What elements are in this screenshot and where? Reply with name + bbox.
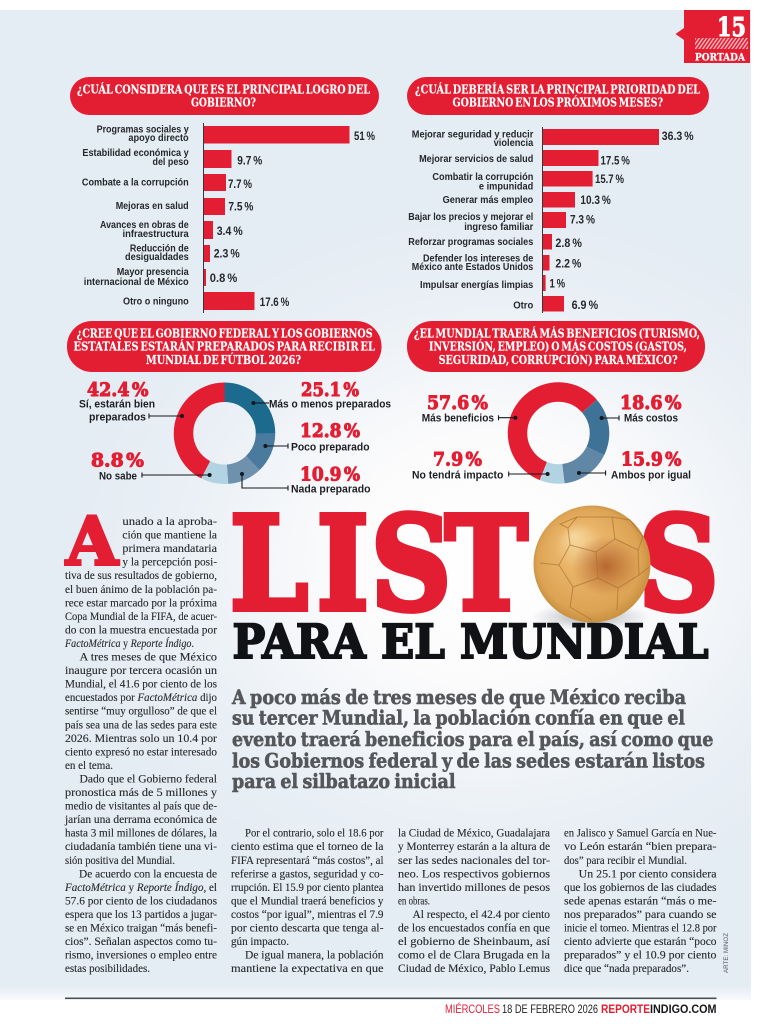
bar chart: logro: 3.4 % [217, 224, 243, 238]
page tab: 15 portada [676, 10, 750, 64]
bar chart: logro: 7.5 % [228, 200, 254, 214]
callout: 18.6 % mas costos: 18.6 % [620, 392, 682, 414]
text column 1: inaugure por tercera ocasión un [65, 664, 217, 677]
heading pill: beneficios: SEGURIDAD, CORRUPCIÓN) PARA MÉXICO? [439, 351, 678, 367]
text column 4: preparados” y el 10.9 por ciento [564, 949, 717, 962]
text column 3: en obras. [398, 894, 430, 907]
subheading: su tercer Mundial, la población confía en que el [232, 706, 685, 730]
text column 1: se en México traigan “más benefi- [65, 922, 217, 934]
text column 2: ciento estima que el torneo de la [231, 840, 384, 853]
callout: 8.8 % no sabe: 8.8 % [91, 450, 144, 472]
heading pill: prioridad [407, 77, 709, 115]
text column 1: ciudadanía también tiene una vi- [65, 840, 217, 853]
callout: 25.1 % mas o menos preparados: Más o menos preparados [269, 399, 391, 411]
callout: 10.9 % nada preparado [240, 464, 371, 496]
text column 3 [398, 827, 551, 975]
text column 4: vo León estarán “bien prepara- [564, 840, 717, 853]
text column 2: costos “por igual”, mientras el 7.9 [231, 908, 384, 921]
callout: 8.8 % no sabe [91, 450, 212, 482]
text column 1: primera mandataria [122, 542, 217, 555]
text column 2: mantiene la expectativa en que [231, 962, 384, 975]
callout: 7.9 % no tendra impacto: No tendrá impacto [412, 470, 504, 482]
text column 3: como el de Clara Brugada en la [398, 949, 550, 962]
footer date and site: MIÉRCOLES [445, 1003, 500, 1016]
bar chart: prioridad: Defender los intereses de [423, 254, 534, 264]
callout: 8.8 % no sabe: No sabe [99, 470, 137, 482]
bar chart: logro: apoyo directo [128, 133, 189, 144]
bar chart: logro [82, 123, 375, 313]
text column 2: que el Mundial traerá beneficios y [231, 894, 384, 907]
text column 1: rismo, inversiones o empleo entre [65, 949, 217, 962]
heading pill: logro: ¿CUÁL CONSIDERA QUE ES EL PRINCIPAL LOGRO DEL [77, 82, 370, 96]
text column 4: Un 25.1 por ciento considera [579, 867, 716, 880]
callout: 12.8 % poco preparado [263, 420, 370, 453]
text column 1: do con la muestra encuestada por [65, 623, 217, 636]
bar chart: prioridad: Combatir la corrupción [432, 172, 533, 183]
text column 1: rece estar marcado por la próxima [65, 596, 217, 609]
bar chart: prioridad: 10.3 % [580, 193, 611, 207]
subheading: los Gobiernos federal y de las sedes estarán listos [232, 748, 705, 772]
heading pill: beneficios [407, 321, 705, 372]
bar chart: prioridad: Impulsar energías limpias [420, 280, 534, 291]
bar chart: prioridad: Bajar los precios y mejorar el [408, 212, 534, 223]
callout: 57.6 % mas beneficios: Más beneficios [422, 413, 494, 425]
callout: 10.9 % nada preparado: 10.9 % [300, 464, 360, 486]
callout: 7.9 % no tendra impacto: 7.9 % [433, 449, 482, 471]
heading pill: preparados: ¿CREE QUE EL GOBIERNO FEDERAL Y LOS GOBIERNOS [77, 326, 373, 340]
text column 3: Al respecto, el 42.4 por ciento [412, 908, 550, 921]
text column 2: De igual manera, la población [245, 949, 384, 962]
text column 2: rrupción. El 15.9 por ciento plantea [231, 881, 384, 894]
panel: beneficios o costos [407, 321, 705, 491]
footer date and site [445, 1003, 716, 1016]
panel: principal logro del gobierno [70, 77, 379, 313]
bar chart: prioridad: 36.3 % [662, 129, 694, 143]
page tab: 15 portada: PORTADA [695, 52, 745, 64]
callout: 18.6 % mas costos [600, 392, 682, 425]
text column 1: hasta 3 mil millones de dólares, la [65, 827, 217, 840]
bar chart: logro: Mayor presencia [117, 267, 189, 278]
callout: 42.4 % bien preparados [79, 379, 184, 423]
callout: 42.4 % bien preparados: 42.4 % [87, 379, 148, 401]
text column 4: ciento advierte que estarán “poco [564, 935, 717, 948]
callout: 57.6 % mas beneficios: 57.6 % [427, 392, 488, 414]
bar chart: prioridad: Mejorar servicios de salud [419, 154, 533, 165]
text column 1: tiva de sus resultados de gobierno, [65, 569, 217, 582]
callout: 42.4 % bien preparados: Sí, estarán bien [79, 399, 155, 411]
footer date and site: REPORTE [601, 1004, 650, 1016]
text column 1: ciento expresó no estar interesado [65, 745, 217, 758]
bar chart: prioridad: 17.5 % [600, 154, 630, 168]
text column 2: Por el contrario, solo el 18.6 por [245, 827, 384, 840]
bar chart: prioridad: Otro [513, 300, 533, 312]
bar chart: logro: 0.8 % [210, 271, 238, 285]
text column 4: inicie el torneo. Mientras el 12.8 por [564, 922, 717, 934]
bar chart: prioridad: Generar más empleo [443, 195, 533, 206]
bar chart: logro: Combate a la corrupción [82, 178, 189, 188]
text column 4: que los gobiernos de las ciudades [564, 881, 717, 894]
credit: arte: ARTE: MINOZ [723, 933, 730, 973]
text column 2: gún impacto. [231, 935, 289, 948]
bar chart: logro: Estabilidad económica y [82, 148, 189, 159]
text column 4: sede apenas estarán “más o me- [564, 894, 717, 907]
heading pill: logro: GOBIERNO? [191, 94, 256, 110]
text column 1: 57.6 por ciento de los ciudadanos [65, 894, 217, 907]
callout: 12.8 % poco preparado: Poco preparado [291, 441, 370, 453]
bar chart: prioridad: violencia [494, 138, 534, 149]
bar chart: prioridad: 15.7 % [595, 172, 624, 186]
text column 1: FactoMétrica y Reporte Índigo, el [64, 880, 217, 894]
bar chart: logro: Mejoras en salud [116, 201, 189, 212]
bar chart: prioridad: 6.9 % [572, 298, 598, 312]
callout: 25.1 % mas o menos preparados: 25.1 % [301, 379, 359, 401]
text column 1: 2026. Mientras solo un 10.4 por [65, 732, 217, 745]
drop cap: A [65, 502, 119, 580]
heading pill: preparados: ESTATALES ESTARÁN PREPARADOS PARA RECIBIR EL [74, 338, 375, 354]
bar chart: prioridad: ingreso familiar [464, 222, 533, 233]
text column 3: ser las sedes nacionales del tor- [398, 854, 550, 867]
text column 4: nos preparados” para cuando se [564, 908, 716, 921]
text column 3: de los encuestados confía en que [398, 922, 550, 934]
text column 2: FIFA representará “más costos”, al [231, 854, 384, 867]
text column 1: unado a la aproba- [122, 515, 217, 528]
text column 3: y Monterrey estarán a la altura de [398, 840, 550, 853]
text column 3: el gobierno de Sheinbaum, así [398, 935, 551, 948]
heading pill: preparados [67, 321, 382, 372]
text column 2 [231, 827, 384, 975]
text column 1: ción que mantiene la [122, 529, 217, 542]
text column 4: dos” para recibir el Mundial. [564, 854, 687, 867]
text column 1: espera que los 13 partidos a jugar- [65, 908, 217, 921]
footer date and site: INDIGO.COM [650, 1004, 716, 1016]
text column 1 [64, 515, 217, 975]
title: para el mundial: PARA EL MUNDIAL [232, 615, 708, 670]
text column 1: Copa Mundial de la FIFA, de acuer- [65, 610, 217, 623]
subheading: para el silbatazo inicial [232, 769, 456, 793]
bar chart: logro: Otro o ninguno [123, 296, 189, 308]
bar chart: logro: 9.7 % [237, 153, 263, 167]
callout: 18.6 % mas costos: Más costos [624, 413, 678, 425]
bar chart: prioridad: 7.3 % [570, 213, 595, 227]
donut chart: preparados [184, 392, 266, 474]
text column 3: Ciudad de México, Pablo Lemus [398, 962, 550, 975]
bar chart: prioridad: 1 % [550, 277, 565, 291]
text column 1: pronostica más de 5 millones y [65, 786, 217, 799]
ball shadow [530, 603, 650, 631]
bar chart: logro: del peso [152, 157, 189, 168]
text column 1: y la percepción posi- [122, 556, 217, 569]
text column 1: en el tema. [65, 759, 113, 772]
icon: golden soccer ball [534, 506, 650, 622]
bar chart: prioridad: Mejorar seguridad y reducir [412, 130, 533, 140]
panel: principal prioridad del gobierno [407, 77, 709, 313]
bar chart: logro: Reducción de [130, 244, 189, 254]
text column 3: neo. Los respectivos gobiernos [398, 867, 551, 880]
bar chart: logro: 2.3 % [214, 247, 240, 261]
page tab: 15 portada: 15 [717, 13, 746, 43]
text column 1: jarían una derrama económica de [64, 813, 217, 826]
text column 1: A tres meses de que México [80, 650, 217, 664]
callout: 7.9 % no tendra impacto [412, 449, 550, 482]
bar chart: prioridad: 2.8 % [555, 236, 582, 250]
text column 3: han invertido millones de pesos [398, 881, 550, 894]
text column 3: la Ciudad de México, Guadalajara [398, 827, 550, 840]
text column 1: De acuerdo con la encuesta de [79, 867, 217, 880]
footer date and site: 18 DE FEBRERO 2026 [502, 1004, 598, 1016]
text column 2: referirse a gastos, seguridad y co- [231, 867, 384, 880]
text column 1: Dado que el Gobierno federal [80, 772, 217, 786]
callout: 15.9 % ambos por igual [577, 449, 691, 482]
callout: 25.1 % mas o menos preparados [251, 379, 391, 411]
bar chart: logro: 17.6 % [260, 295, 289, 309]
panel: preparacion de gobiernos [67, 321, 391, 496]
callout: 15.9 % ambos por igual: 15.9 % [621, 449, 682, 471]
bar chart: logro: Programas sociales y [97, 124, 189, 136]
heading pill: preparados: MUNDIAL DE FÚTBOL 2026? [146, 351, 301, 367]
bar chart: prioridad [408, 127, 694, 313]
text column 1: estas posibilidades. [65, 962, 150, 975]
callout: 15.9 % ambos por igual: Ambos por igual [611, 470, 691, 482]
text column 1: Mundial, el 41.6 por ciento de los [65, 678, 217, 691]
heading pill: logro [70, 77, 379, 115]
heading pill: beneficios: INVERSIÓN, EMPLEO) O MÁS COSTOS (GASTOS, [429, 338, 687, 354]
heading pill: prioridad: GOBIERNO EN LOS PRÓXIMOS MESES? [452, 94, 663, 110]
text column 1: el buen ánimo de la población pa- [65, 583, 217, 596]
bar chart: logro: infraestructura [122, 229, 189, 240]
bar chart: prioridad: Reforzar programas sociales [408, 237, 534, 248]
bar chart: prioridad: e impunidad [479, 182, 533, 192]
callout: 57.6 % mas beneficios [422, 392, 517, 425]
text column 1: sentirse “muy orgulloso” de que el [65, 705, 217, 718]
callout: 10.9 % nada preparado: Nada preparado [291, 484, 371, 496]
text column 4: dice que “nada preparados”. [564, 962, 689, 975]
text column 1: FactoMétrica y Reporte Índigo. [64, 636, 194, 650]
bar chart: logro: desigualdades [125, 252, 189, 263]
text column 1: país sea una de las sedes para este [65, 718, 217, 731]
bar chart: prioridad: México ante Estados Unidos [412, 262, 534, 273]
bar chart: logro: Avances en obras de [100, 220, 189, 231]
subheading: A poco más de tres meses de que México reciba [231, 685, 686, 709]
text column 1: cios”. Señalan aspectos como tu- [65, 935, 217, 948]
callout: 42.4 % bien preparados: preparados [89, 411, 146, 423]
text column 2: por ciento descarta que tenga al- [231, 922, 384, 934]
donut chart: beneficios [501, 375, 616, 491]
text column 4: en Jalisco y Samuel García en Nue- [564, 827, 717, 840]
callout: 12.8 % poco preparado: 12.8 % [300, 420, 360, 442]
bar chart: logro: 51 % [354, 129, 375, 143]
text column 1: encuestados por FactoMétrica dijo [65, 691, 217, 704]
text column 1: sión positiva del Mundial. [65, 854, 175, 867]
bar chart: logro: internacional de México [84, 277, 189, 288]
text column 1: medio de visitantes al país que de- [65, 800, 217, 813]
bar chart: logro: 7.7 % [228, 177, 252, 191]
title: listos: LISTOS [230, 489, 719, 640]
text column 4 [564, 827, 717, 975]
bar chart: prioridad: 2.2 % [555, 257, 582, 271]
subheading [231, 685, 713, 793]
footer rule [65, 998, 716, 999]
